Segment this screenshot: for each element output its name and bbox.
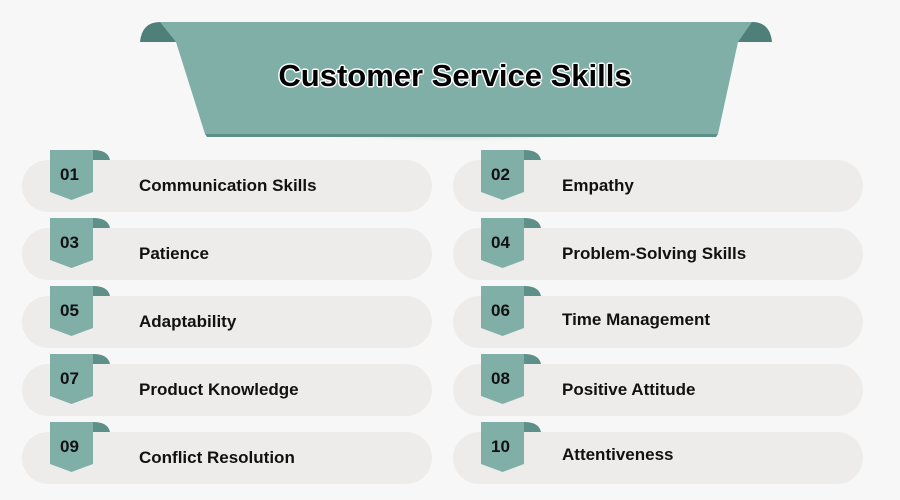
item 04: Problem-Solving Skills [562,244,746,263]
item 07: 07 [60,369,79,388]
item 10 [453,432,863,484]
item 05: 05 [60,301,79,320]
item 08: Positive Attitude [562,380,696,399]
item 03: Patience [139,244,209,263]
item 01: Communication Skills [139,176,317,195]
item 08: 08 [491,369,510,388]
item 10: 10 [491,437,510,456]
item 09: Conflict Resolution [139,448,295,467]
item 08 [453,364,863,416]
item 09 [22,432,432,484]
item 01: 01 [60,165,79,184]
item 06: Time Management [562,310,710,329]
item 04 [453,228,863,280]
item 05 [22,296,432,348]
item 05: Adaptability [139,312,236,331]
item 02 [453,160,863,212]
title banner [140,22,772,139]
item 09: 09 [60,437,79,456]
item 07 [22,364,432,416]
item 02: Empathy [562,176,634,195]
item 04: 04 [491,233,510,252]
item 02: 02 [491,165,510,184]
item 06 [453,296,863,348]
item 03: 03 [60,233,79,252]
title: Customer Service Skills [278,58,632,93]
item 01 [22,160,432,212]
item 03 [22,228,432,280]
item 07: Product Knowledge [139,380,299,399]
item 10: Attentiveness [562,445,673,464]
item 06: 06 [491,301,510,320]
